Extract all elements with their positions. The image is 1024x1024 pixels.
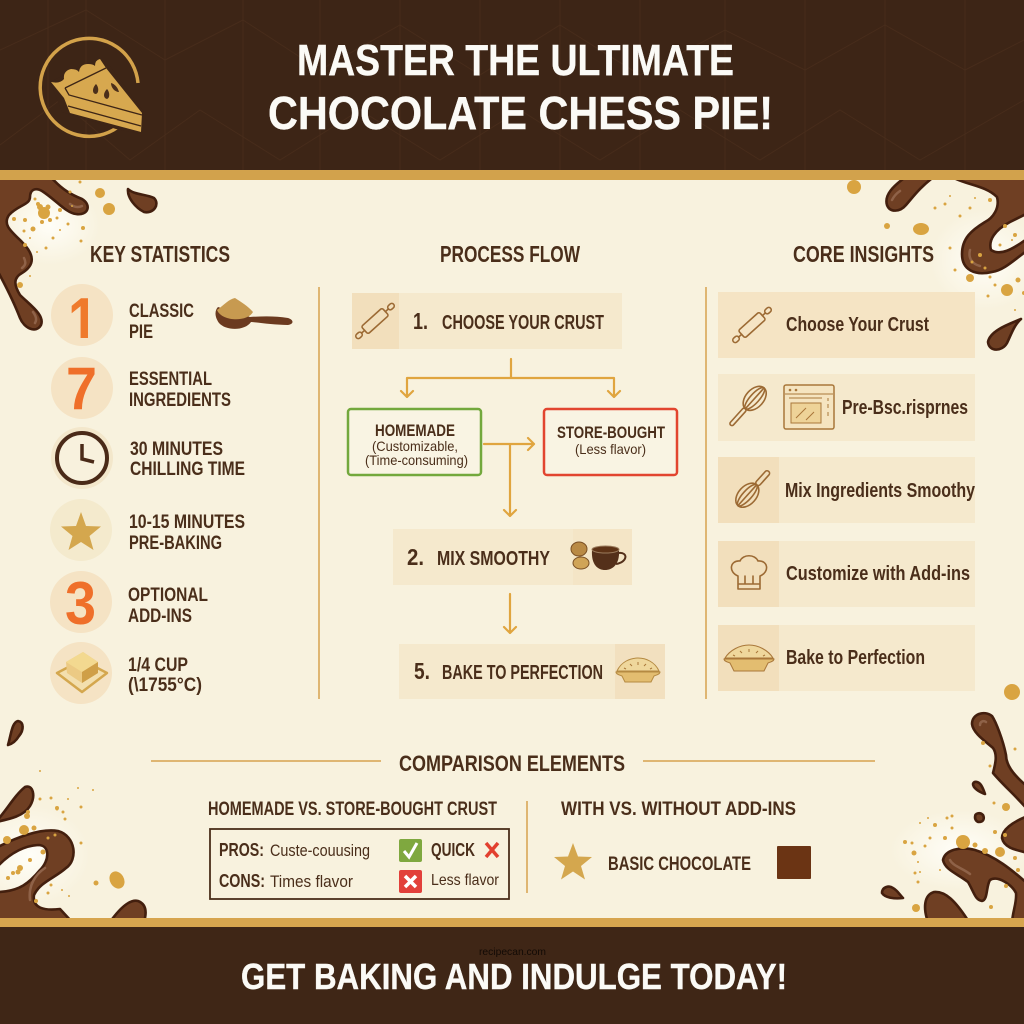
heading: core insights: CORE INSIGHTS [793,241,934,267]
stat: 3 optional add-ins [50,570,208,637]
step 2: mix smoothy [393,529,632,585]
stat: 3 optional add-ins: 3 [65,570,96,637]
insight: bake to perfection: Bake to Perfection [786,647,925,669]
arrow: step 2 to bake [504,594,516,633]
footer banner: recipecan.com [479,947,546,958]
panel: homemade vs store-bought: CONS: [219,871,265,891]
stat: 7 essential ingredients [51,355,231,422]
insight: mix ingredients smoothy [718,457,976,523]
panel: homemade vs store-bought: HOMEMADE VS. STORE-BOUGHT CRUST [208,799,497,820]
step 1: choose your crust: 1. [413,308,428,334]
step 2: mix smoothy: MIX SMOOTHY [437,548,551,570]
panel: homemade vs store-bought: QUICK [431,840,475,860]
stat: 10-15 minutes pre-baking: PRE-BAKING [129,533,222,554]
footer banner: GET BAKING AND INDULGE TODAY! [241,956,787,997]
step 5: bake to perfection: 5. [414,658,430,684]
heading: process flow: PROCESS FLOW [440,241,580,267]
insight: customize with add-ins: Customize with Add-ins [786,563,970,585]
panel: homemade vs store-bought [208,799,509,899]
icon: red cross [486,843,498,857]
icon: nuts and coffee cup [571,542,625,570]
stat: 7 essential ingredients: ESSENTIAL [129,369,212,390]
step 2: mix smoothy: 2. [407,544,424,570]
panel: process flow [348,293,677,699]
stat: 1 classic pie [51,284,194,346]
insight: mix ingredients smoothy: Mix Ingredients Smoothy [785,480,976,502]
stat: 1 classic pie: PIE [129,322,153,343]
insight: pre-bake crispness: Pre-Bsc.risprnes [842,397,968,419]
panel: with vs without add-ins [554,799,811,880]
insight: bake to perfection [718,625,975,691]
arrow: split to both crusts [401,359,620,397]
insight: choose your crust: Choose Your Crust [786,314,929,336]
icon: pie [616,658,660,682]
stat: 30 minutes chilling time: CHILLING TIME [130,459,245,480]
panel: homemade vs store-bought: Less flavor [431,872,500,889]
panel: key statistics [50,284,292,704]
panel: homemade vs store-bought: Custe-couusing [270,841,370,860]
panel: with vs without add-ins: WITH VS. WITHOUT ADD-INS [561,799,796,820]
option: homemade: (Customizable, [372,438,458,454]
column divider right [705,287,707,699]
stat: 30 minutes chilling time [51,427,245,489]
panel: homemade vs store-bought: Times flavor [270,872,353,891]
option: store-bought: STORE-BOUGHT [557,423,665,442]
stat: 1 classic pie: CLASSIC [129,301,194,322]
icon: oven [784,385,834,429]
stat: 1 classic pie: 1 [68,284,98,360]
panel: with vs without add-ins: BASIC CHOCOLATE [608,854,751,875]
chocolate splash: top right [847,172,1024,350]
stat: 1/4 cup butter: (\1755°C) [128,675,202,696]
arrow: homemade to store-bought and down [484,438,534,516]
comparison divider [526,801,528,893]
title: CHOCOLATE CHESS PIE! [268,87,773,139]
panel: homemade vs store-bought: PROS: [219,840,264,860]
icon: pie slice logo [40,38,144,136]
stat: 7 essential ingredients: 7 [66,355,97,422]
chocolate splash: bottom right [882,684,1024,922]
chocolate splash: bottom left [0,721,146,922]
icon: spoon with sugar [216,298,292,329]
stat: 3 optional add-ins: ADD-INS [128,606,192,627]
icon: pie [724,645,774,671]
step 1: choose your crust [352,293,622,349]
insight: choose your crust [718,292,975,358]
footer banner [0,918,1024,1024]
stat: 10-15 minutes pre-baking: 10-15 MINUTES [129,512,245,533]
option: homemade: HOMEMADE [375,421,455,440]
insight: pre-bake crispness [718,374,975,441]
stat: 30 minutes chilling time: 30 MINUTES [130,439,223,460]
stat: 1/4 cup butter [50,642,202,704]
column divider left [318,287,320,699]
stat: 7 essential ingredients: INGREDIENTS [129,390,231,411]
stat: 3 optional add-ins: OPTIONAL [128,585,208,606]
option: store-bought: (Less flavor) [575,441,646,457]
stat: 1/4 cup butter: 1/4 CUP [128,655,188,676]
heading: key statistics: KEY STATISTICS [90,241,230,267]
option: homemade [348,409,481,475]
header banner [0,0,1024,180]
stat: 10-15 minutes pre-baking [50,499,245,561]
title [268,36,773,139]
insight: customize with add-ins [718,541,975,607]
step 5: bake to perfection [399,644,665,699]
option: homemade: (Time-consuming) [365,452,468,468]
icon: red cross box [399,870,422,893]
heading: comparison elements: COMPARISON ELEMENTS [399,751,625,776]
step 1: choose your crust: CHOOSE YOUR CRUST [442,312,604,334]
option: store-bought [544,409,677,475]
step 5: bake to perfection: BAKE TO PERFECTION [442,662,603,684]
title: MASTER THE ULTIMATE [297,36,734,85]
chocolate splash: top left [0,176,156,329]
panel: core insights [718,292,976,691]
icon: green check [399,839,422,862]
